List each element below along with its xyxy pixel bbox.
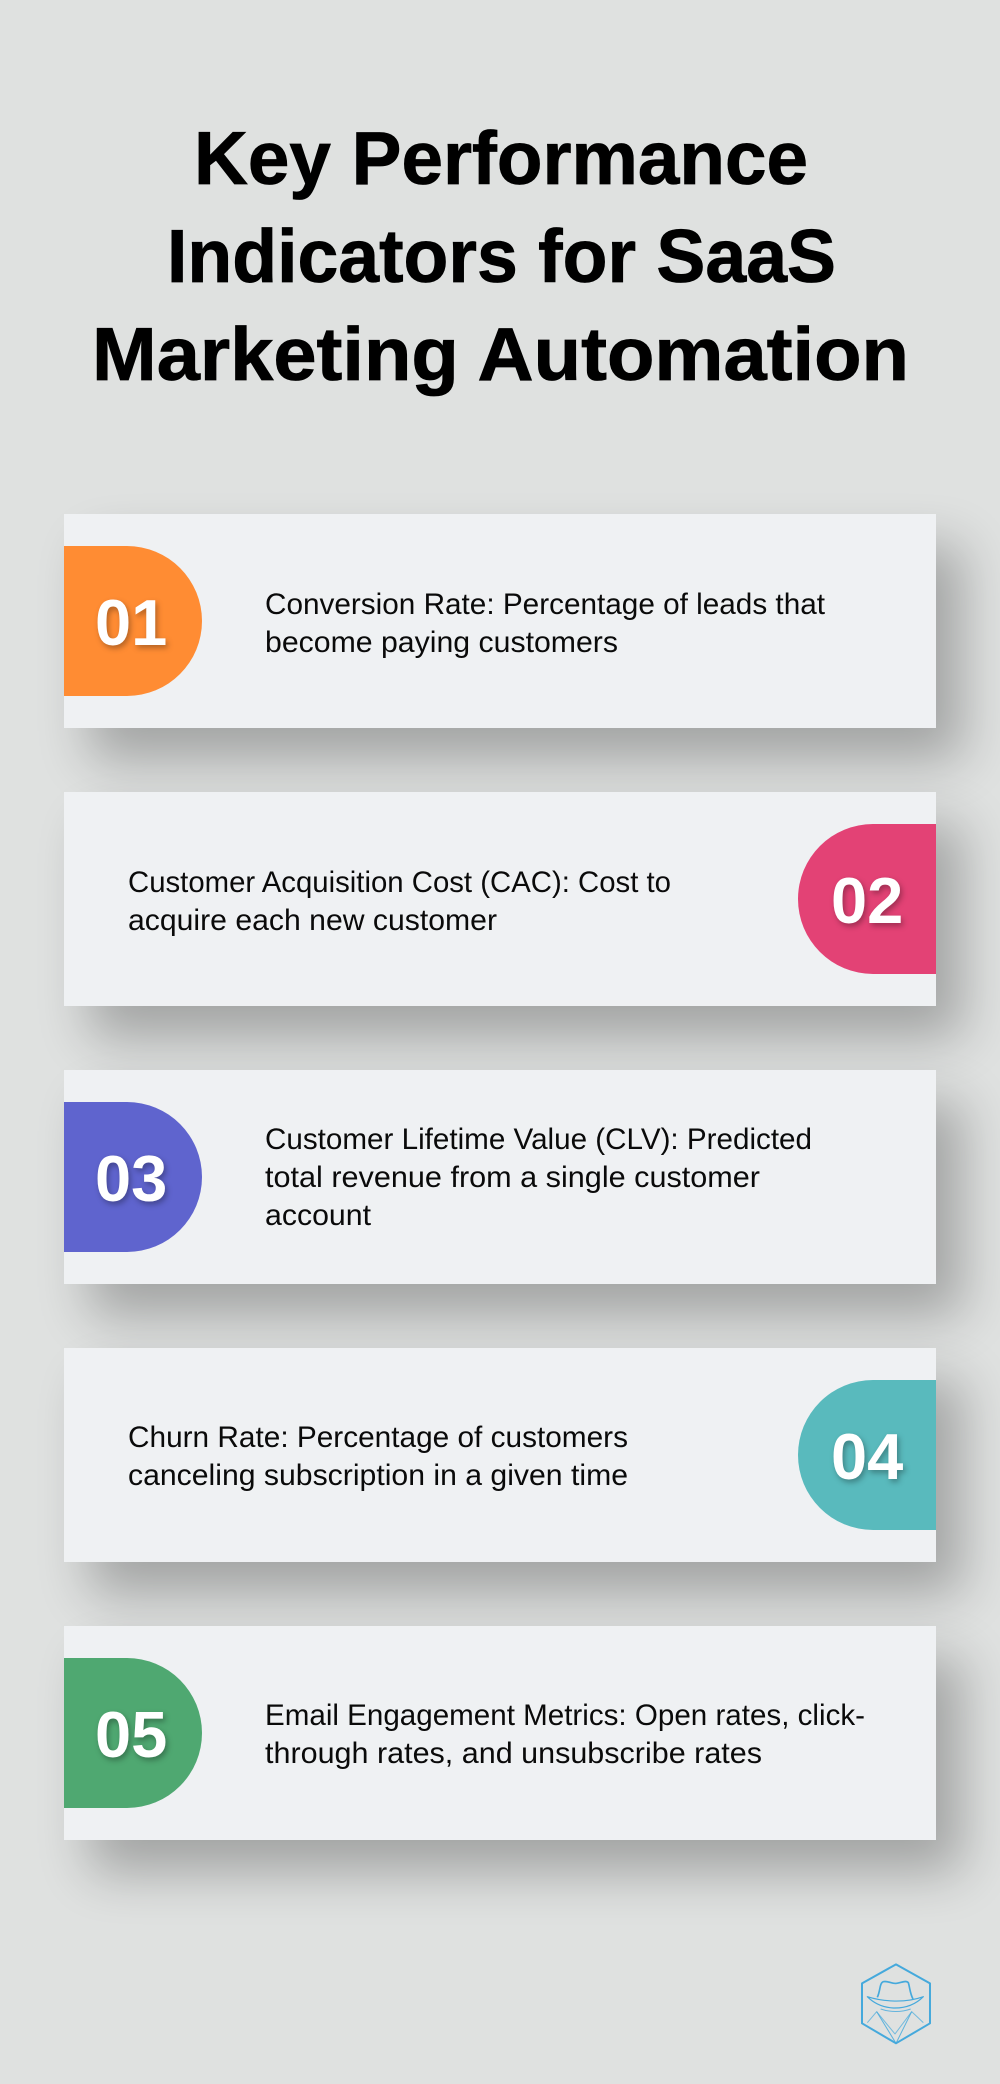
badge 05: 05: [95, 1698, 167, 1771]
badge 01: [64, 546, 202, 696]
badge 05: [64, 1658, 202, 1808]
panel: KPI 05 email engagement metrics: [64, 1626, 962, 1872]
text: conversion rate: become paying customers: [265, 626, 618, 659]
badge 03: [64, 1102, 202, 1252]
text: email engagement metrics: Email Engagement Metrics: Open rates, click-: [265, 1699, 865, 1732]
badge 03: 03: [95, 1142, 167, 1215]
text: email engagement metrics: through rates, and unsubscribe rates: [265, 1737, 762, 1770]
text: conversion rate: [265, 588, 826, 659]
title: [92, 116, 909, 396]
text: churn rate: [128, 1421, 628, 1492]
text: customer lifetime value: total revenue from a single customer: [265, 1161, 760, 1194]
icon: hexagon logo with hat and collar: [862, 1964, 930, 2043]
text: customer acquisition cost: [128, 866, 671, 937]
title: Marketing Automation: [92, 312, 909, 396]
text: churn rate: Churn Rate: Percentage of customers: [128, 1421, 628, 1454]
badge 01: 01: [95, 586, 167, 659]
text: customer lifetime value: Customer Lifetime Value (CLV): Predicted: [265, 1123, 812, 1156]
panel: KPI 01 conversion rate: [64, 514, 962, 760]
panel: KPI 02 customer acquisition cost: [64, 792, 962, 1038]
text: customer acquisition cost: Customer Acquisition Cost (CAC): Cost to: [128, 866, 671, 899]
panel: KPI 03 customer lifetime value: [64, 1070, 962, 1316]
badge 02: [798, 824, 936, 974]
badge 02: 02: [831, 864, 903, 937]
text: customer lifetime value: account: [265, 1199, 372, 1232]
text: churn rate: canceling subscription in a given time: [128, 1459, 628, 1492]
title: Key Performance: [194, 116, 808, 200]
badge 04: 04: [831, 1420, 903, 1493]
text: customer acquisition cost: acquire each new customer: [128, 904, 497, 937]
text: customer lifetime value: [265, 1123, 812, 1232]
text: conversion rate: Conversion Rate: Percentage of leads that: [265, 588, 826, 621]
title: Indicators for SaaS: [167, 214, 836, 298]
text: email engagement metrics: [265, 1699, 865, 1770]
panel: KPI 04 churn rate: [64, 1348, 962, 1594]
badge 04: [798, 1380, 936, 1530]
